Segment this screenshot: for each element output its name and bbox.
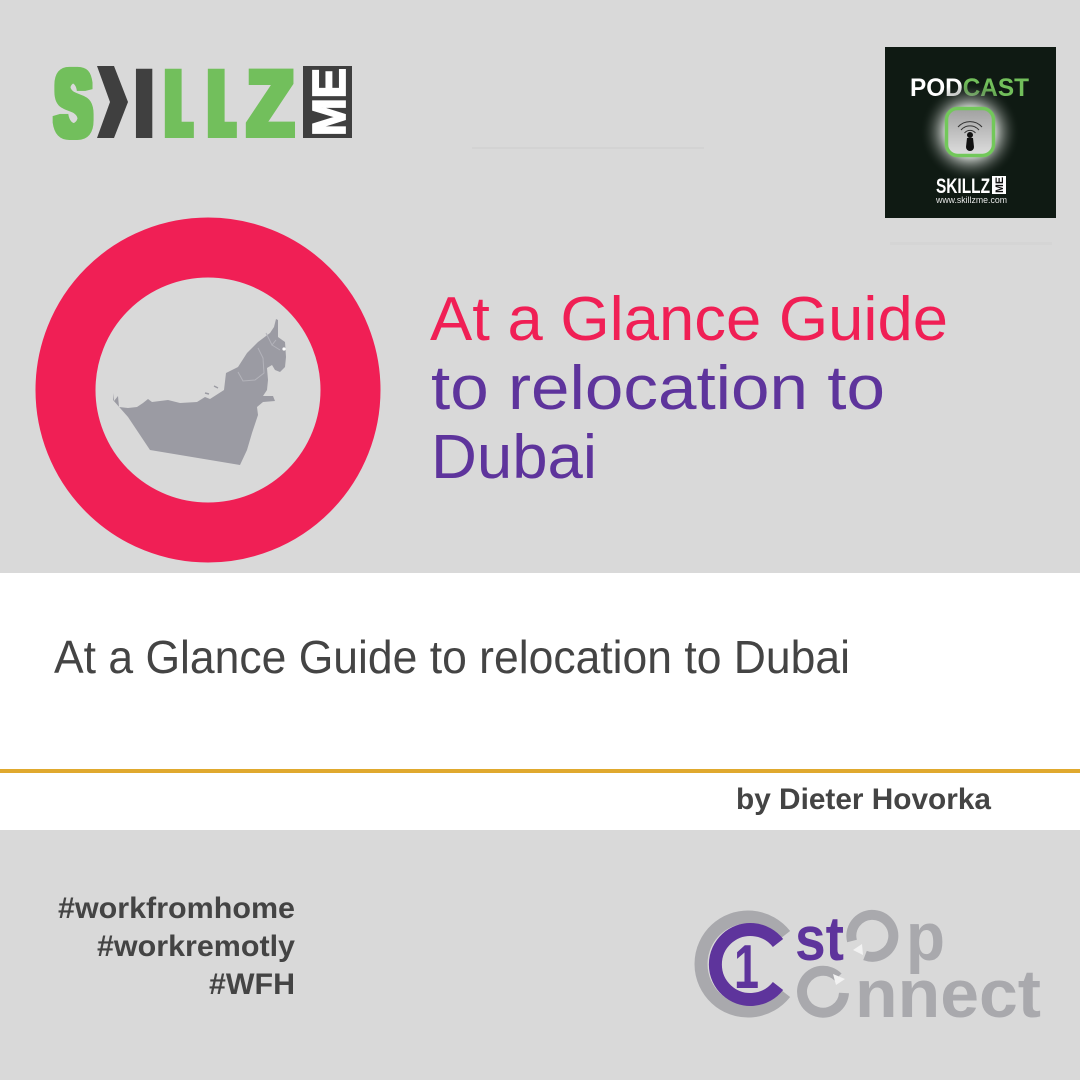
hashtags: #WFH [209,968,295,1001]
author: by Dieter Hovorka [736,783,991,816]
icon: podcast button [946,108,994,156]
logo: Skillz Me: Z [246,53,294,155]
icon: glow behind button [920,82,1020,182]
logo: Skillz Me [55,51,356,157]
white band [0,573,1080,830]
logo: Skillz Me: ME [304,68,356,136]
logo: Skillz Me: L [212,51,232,155]
hashtags [58,892,295,1001]
title: At a Glance Guide [430,285,948,354]
logo: Skillz Me: L [169,51,189,155]
map: UAE [113,319,286,465]
logo: Skillz Me: I [138,53,150,155]
small Skillz Me logo: SKILLZ [936,175,990,198]
title: Dubai [431,423,597,492]
logo: 1stOp Connect [701,899,1041,1032]
podcast label: PODCAST [910,74,1029,102]
logo: 1stOp Connect: st [795,905,844,974]
logo: 1stOp Connect: p [906,899,945,975]
subtitle: At a Glance Guide to relocation to Dubai [54,631,850,683]
podcast badge [885,47,1056,218]
podcast badge: ME [994,177,1006,193]
title [430,285,948,492]
logo: 1stOp Connect: 1 [734,933,759,1002]
hashtags: #workfromhome [58,892,295,925]
hashtags: #workremotly [97,930,295,963]
title: to relocation to [431,354,885,423]
url: www.skillzme.com [935,195,1007,205]
logo: Skillz Me: S [55,52,92,157]
logo: 1stOp Connect: nnect [855,956,1041,1032]
ring with UAE map [66,248,350,532]
